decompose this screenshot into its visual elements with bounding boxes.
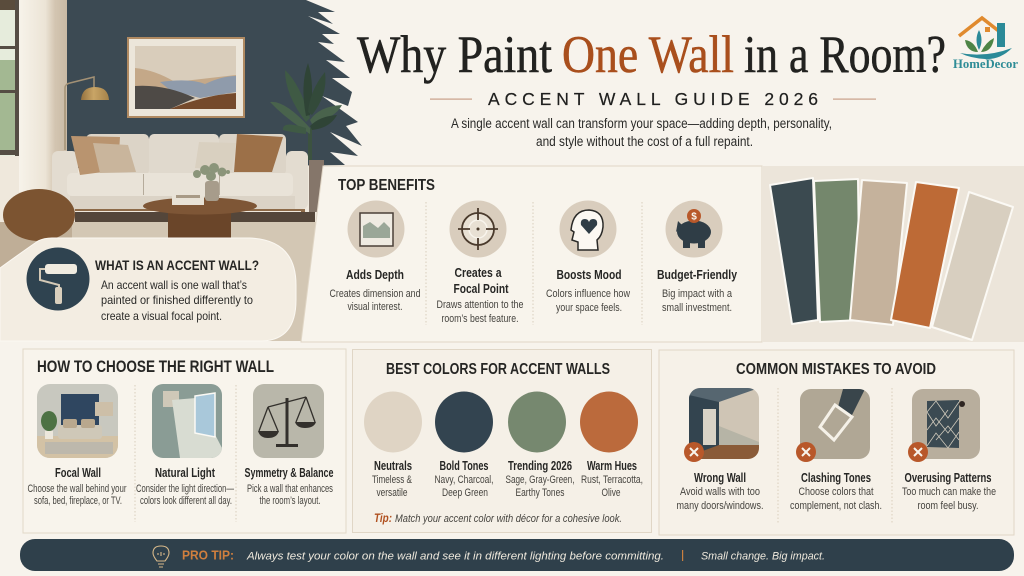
label: PRO TIP: <box>182 548 234 562</box>
image: focal wall room <box>37 384 118 458</box>
item: focal point: Draws attention to the <box>436 299 524 311</box>
item: adds depth: Creates dimension and <box>330 288 420 300</box>
icon: piggy bank <box>666 200 722 258</box>
item: focal point <box>436 265 524 325</box>
item: overusing patterns <box>902 470 996 512</box>
panel: top benefits <box>301 166 762 342</box>
swatch: charcoal <box>770 178 818 324</box>
item: focal wall: sofa, bed, fireplace, or TV. <box>34 495 122 507</box>
swatch: terracotta <box>891 182 959 328</box>
icon: piggy bank: $ <box>691 212 697 222</box>
image: overusing patterns <box>912 389 980 459</box>
image: wrong wall <box>689 388 759 459</box>
color: bold tones: Deep Green <box>442 487 488 499</box>
body text: An accent wall is one wall that’s <box>101 278 247 292</box>
color: bold tones <box>434 392 494 499</box>
callout: what is an accent wall <box>0 238 296 341</box>
icon: paint roller <box>26 248 90 310</box>
title: Why Paint <box>357 26 552 84</box>
swatch: tan <box>850 180 907 325</box>
divider <box>682 550 683 561</box>
item: focal point: Focal Point <box>454 281 509 296</box>
plant <box>270 63 342 212</box>
panel: how to choose the right wall <box>23 349 346 533</box>
pillows <box>71 134 283 175</box>
tip: Match your accent color with décor for a cohesive look. <box>395 513 622 525</box>
color: bold tones: Bold Tones <box>440 458 488 473</box>
color: neutrals <box>364 392 422 499</box>
body text: painted or finished differently to <box>101 293 253 307</box>
vase with flowers <box>193 163 230 201</box>
image: balance scale <box>253 384 324 458</box>
room photo <box>0 0 362 341</box>
tip: Tip: <box>374 513 392 525</box>
item: focal wall <box>28 465 127 507</box>
color: neutrals: Neutrals <box>374 458 412 473</box>
icon: target <box>450 200 506 258</box>
subtitle: ACCENT WALL GUIDE 2026 <box>488 89 818 109</box>
tip text: Always test your color on the wall and see it in different lighting before committing. <box>246 550 664 562</box>
color: warm hues <box>580 392 643 499</box>
item: natural light <box>136 465 234 507</box>
item: clashing tones: complement, not clash. <box>790 500 882 512</box>
intro text <box>451 116 832 149</box>
icon: light bulb <box>153 546 169 567</box>
pro tip bar <box>20 539 1014 571</box>
item: overusing patterns: room feel busy. <box>918 500 978 512</box>
item: symmetry and balance: the room’s layout. <box>260 495 320 507</box>
color: trending 2026: Sage, Gray-Green, <box>506 474 574 486</box>
heading: WHAT IS AN ACCENT WALL? <box>95 258 259 273</box>
item: budget friendly: Big impact with a <box>662 288 732 300</box>
color: trending 2026 <box>506 392 574 499</box>
image: natural light <box>152 384 222 458</box>
logo: HomeDecor <box>953 18 1018 71</box>
logo: HomeDecor: HomeDecor <box>953 56 1018 71</box>
item: overusing patterns: Overusing Patterns <box>904 470 992 485</box>
item: boosts mood: your space feels. <box>556 302 622 314</box>
item: boosts mood <box>546 267 630 314</box>
swatch: cream <box>932 192 1013 340</box>
panel: best colors <box>352 350 652 532</box>
item: focal wall: Focal Wall <box>55 465 101 480</box>
item: focal point: room’s best feature. <box>442 313 518 325</box>
color: trending 2026: Earthy Tones <box>516 487 565 499</box>
item: adds depth: Adds Depth <box>346 267 404 282</box>
framed art <box>127 37 245 118</box>
tagline: Small change. Big impact. <box>701 550 825 562</box>
item: clashing tones: Choose colors that <box>798 486 874 498</box>
item: wrong wall <box>676 470 764 512</box>
sofa <box>52 134 308 222</box>
rug and floor <box>0 222 320 341</box>
item: adds depth: visual interest. <box>348 301 402 313</box>
painted accent wall with brush edge <box>60 0 362 168</box>
color: bold tones: Navy, Charcoal, <box>434 474 494 486</box>
item: focal point: Creates a <box>454 265 502 280</box>
title <box>357 26 946 84</box>
item: clashing tones <box>790 470 882 512</box>
item: natural light: Natural Light <box>155 465 215 480</box>
icon: head with heart <box>560 200 616 258</box>
color: neutrals: versatile <box>376 487 408 499</box>
color: warm hues: Olive <box>602 487 620 499</box>
heading: COMMON MISTAKES TO AVOID <box>736 361 936 378</box>
title: in a Room? <box>744 26 946 84</box>
item: adds depth <box>330 267 420 313</box>
item: clashing tones: Clashing Tones <box>801 470 871 485</box>
heading: HOW TO CHOOSE THE RIGHT WALL <box>37 357 274 376</box>
image: clashing tones <box>800 389 870 459</box>
heading: TOP BENEFITS <box>338 177 435 194</box>
item: budget friendly: Budget-Friendly <box>657 267 738 282</box>
heading: BEST COLORS FOR ACCENT WALLS <box>386 361 610 378</box>
panel: common mistakes <box>659 350 1014 535</box>
intro text: A single accent wall can transform your space—adding depth, personality, <box>451 116 832 131</box>
item: symmetry and balance: Symmetry & Balance <box>244 465 334 480</box>
panel: paint swatches <box>762 166 1024 342</box>
item: symmetry and balance <box>244 465 334 507</box>
color: warm hues: Rust, Terracotta, <box>581 474 643 486</box>
item: wrong wall: Wrong Wall <box>694 470 746 485</box>
item: focal wall: Choose the wall behind your <box>28 483 127 495</box>
curtains <box>19 0 67 192</box>
icon: picture frame <box>348 200 404 258</box>
swatch: sage <box>814 179 860 322</box>
item: boosts mood: Boosts Mood <box>556 267 622 282</box>
item: overusing patterns: Too much can make the <box>902 486 996 498</box>
item: natural light: colors look different all day. <box>140 495 232 507</box>
title: One Wall <box>562 26 734 84</box>
floor lamp <box>65 77 109 150</box>
item: natural light: Consider the light direction— <box>136 483 234 495</box>
color: warm hues: Warm Hues <box>587 458 637 473</box>
color: trending 2026: Trending 2026 <box>508 458 572 473</box>
body text: create a visual focal point. <box>101 309 222 323</box>
intro text: and style without the cost of a full repaint. <box>536 134 753 149</box>
icon: x badges <box>684 442 928 462</box>
coffee table <box>143 195 257 240</box>
item: budget friendly: small investment. <box>662 302 732 314</box>
body text <box>101 278 253 323</box>
item: wrong wall: many doors/windows. <box>676 500 764 512</box>
color: neutrals: Timeless & <box>372 474 413 486</box>
window <box>0 0 20 156</box>
item: boosts mood: Colors influence how <box>546 288 630 300</box>
item: budget friendly <box>657 267 738 314</box>
item: symmetry and balance: Pick a wall that enhances <box>247 483 333 495</box>
item: wrong wall: Avoid walls with too <box>680 486 760 498</box>
pouf <box>3 189 75 241</box>
